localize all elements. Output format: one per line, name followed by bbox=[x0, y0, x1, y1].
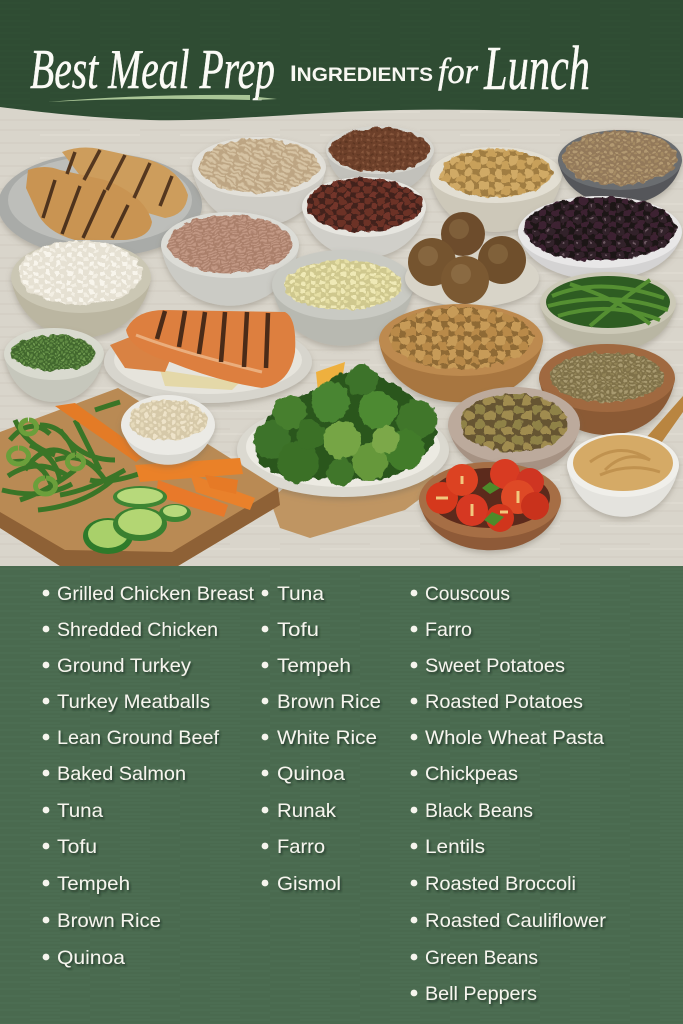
plate: grilled salmon bbox=[104, 310, 312, 403]
ingredient list: column 2: Tofu bbox=[277, 619, 319, 641]
cutting board: right bbox=[270, 470, 445, 538]
ingredient list: column 1: Quinoa bbox=[57, 947, 125, 969]
bowl: cherry tomatoes bbox=[419, 459, 561, 550]
ingredient list: column 1 bbox=[43, 583, 255, 969]
bowl: white beans bbox=[272, 250, 414, 346]
ingredient list: column 1: Tempeh bbox=[57, 873, 130, 895]
ingredient list: column 3: Farro bbox=[425, 619, 472, 641]
plate: broccoli bbox=[237, 362, 449, 497]
bowl: olives and chickpeas bbox=[448, 387, 580, 474]
ingredient list: column 2: Gismol bbox=[277, 873, 341, 895]
ingredient list: column 3: Couscous bbox=[425, 583, 510, 605]
bowl: grains bbox=[558, 130, 682, 205]
vegetables on board bbox=[2, 402, 255, 554]
ingredient list: column 1: Ground Turkey bbox=[57, 655, 191, 677]
bowl: shredded chicken bbox=[192, 137, 326, 226]
bowl: roasted chickpeas bbox=[379, 304, 543, 402]
bowl: chickpeas bbox=[430, 147, 562, 232]
food scene bbox=[0, 126, 683, 566]
title bbox=[30, 35, 590, 103]
carrot sticks bbox=[55, 403, 146, 462]
ingredient list: column 3: Chickpeas bbox=[425, 763, 518, 785]
ingredient list: column 2: Tempeh bbox=[277, 655, 351, 677]
ingredient list: column 2: Runak bbox=[277, 800, 336, 822]
bowl: crumbled tofu bbox=[121, 395, 215, 465]
ingredient list: column 2: Quinoa bbox=[277, 763, 345, 785]
ingredient list: column 2: Brown Rice bbox=[277, 691, 381, 713]
ingredient list: column 1: Turkey Meatballs bbox=[57, 691, 210, 713]
ingredient list: column 1: Tuna bbox=[57, 800, 103, 822]
title underline bbox=[48, 95, 277, 102]
ingredient list: column 2: Farro bbox=[277, 836, 325, 858]
background: wooden table bbox=[0, 100, 683, 570]
ingredient list: column 1: Brown Rice bbox=[57, 910, 161, 932]
green pepper strips bbox=[2, 402, 150, 510]
ingredient list: column 1: Shredded Chicken bbox=[57, 619, 218, 641]
header banner bbox=[0, 0, 683, 120]
ingredient list: column 3: Roasted Potatoes bbox=[425, 691, 583, 713]
bowl: black beans bbox=[518, 196, 682, 280]
ingredient list: column 1: Lean Ground Beef bbox=[57, 727, 220, 749]
ingredient list: column 3: Black Beans bbox=[425, 800, 533, 822]
ingredient list: column 2 bbox=[262, 583, 381, 895]
plate: turkey meatballs bbox=[405, 212, 539, 307]
bowl: green beans bbox=[540, 272, 676, 352]
ingredient list: column 1: Baked Salmon bbox=[57, 763, 186, 785]
ingredient list: column 3: Whole Wheat Pasta bbox=[425, 727, 604, 749]
ingredient list: column 1: Tofu bbox=[57, 836, 97, 858]
title: Lunch bbox=[483, 35, 590, 103]
ingredient list: column 3: Roasted Cauliflower bbox=[425, 910, 607, 932]
ingredient list: column 1: Grilled Chicken Breast bbox=[57, 583, 255, 605]
broccoli florets bbox=[253, 364, 438, 486]
title: Best Meal Prep bbox=[30, 39, 275, 101]
ingredient list: column 3: Roasted Broccoli bbox=[425, 873, 576, 895]
ingredient list: column 3: Bell Peppers bbox=[425, 983, 537, 1005]
ingredient list: column 3: Green Beans bbox=[425, 947, 538, 969]
bowl: peas bbox=[4, 328, 104, 402]
title: for bbox=[438, 51, 479, 91]
bowl: lentils bbox=[539, 344, 675, 435]
bowl: feta crumbles bbox=[11, 241, 151, 338]
bowl: ground beef bbox=[326, 126, 434, 195]
bowl: ground turkey bbox=[161, 212, 299, 306]
title: INGREDIENTS bbox=[290, 61, 433, 86]
ingredient list: column 3: Sweet Potatoes bbox=[425, 655, 565, 677]
plate: grilled chicken breasts bbox=[0, 148, 202, 257]
ingredient list: column 2: Tuna bbox=[277, 583, 324, 605]
bowl: kidney beans bbox=[302, 177, 426, 258]
ingredient panel bbox=[0, 566, 683, 1024]
bowl: hummus with spoon bbox=[567, 396, 683, 517]
ingredient list: column 3 bbox=[411, 583, 607, 1005]
cucumber slices bbox=[83, 518, 133, 554]
cutting board: left bbox=[0, 388, 280, 566]
ingredient list: column 2: White Rice bbox=[277, 727, 377, 749]
ingredient list: column 3: Lentils bbox=[425, 836, 485, 858]
